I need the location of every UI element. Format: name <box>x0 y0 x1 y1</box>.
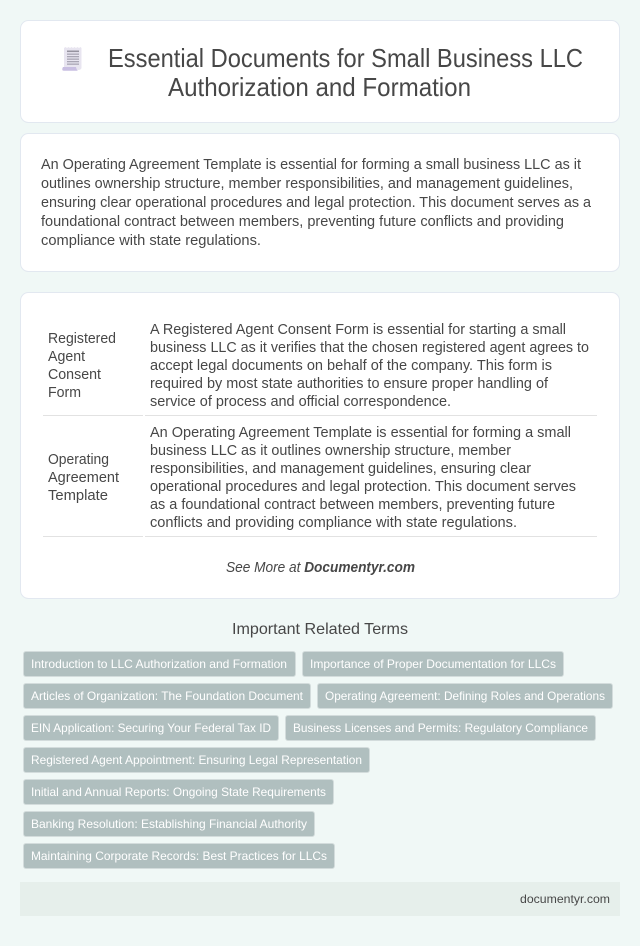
title: Essential Documents for Small Business LLC <box>108 45 583 73</box>
table row: Registered Agent Consent Form: accept legal documents on behalf of the company. This form is <box>150 358 552 374</box>
chip <box>286 716 596 740</box>
table row: Operating Agreement Template: Operating <box>48 452 109 468</box>
panel: documents table <box>20 292 620 598</box>
table row: Operating Agreement Template: as a foundational contract between members, preventing future <box>150 497 555 513</box>
table row: Registered Agent Consent Form: Form <box>48 385 81 401</box>
chip <box>24 844 334 868</box>
chip: Maintaining Corporate Records: Best Practices for LLCs <box>31 849 327 863</box>
chip: Importance of Proper Documentation for LLCs <box>310 657 556 671</box>
title: Authorization and Formation <box>168 74 471 102</box>
chip: Introduction to LLC Authorization and Formation <box>31 657 287 671</box>
chip: Business Licenses and Permits: Regulatory Compliance <box>293 721 588 735</box>
intro text: foundational contract between members, preventing future conflicts and providing <box>41 214 564 230</box>
intro text: ensuring clear operational procedures and legal protection. This document serves as a <box>41 195 591 211</box>
chip <box>24 684 310 708</box>
chip <box>24 780 334 804</box>
intro text: compliance with state regulations. <box>41 233 261 249</box>
chip <box>24 716 278 740</box>
see more link: See More at Documentyr.com <box>226 560 415 576</box>
footer <box>20 882 620 916</box>
chip <box>24 812 314 836</box>
table row: Operating Agreement Template: An Operating Agreement Template is essential for forming a small <box>150 425 571 441</box>
chip <box>318 684 612 708</box>
table row: Registered Agent Consent Form: business LLC as it verifies that the chosen registered agent agrees to <box>150 340 589 356</box>
chip <box>24 748 370 772</box>
table row: Registered Agent Consent Form: Agent <box>48 349 85 365</box>
table row: Operating Agreement Template <box>43 425 597 537</box>
chip: EIN Application: Securing Your Federal Tax ID <box>31 721 271 735</box>
table row: Registered Agent Consent Form <box>43 322 597 416</box>
intro text <box>41 157 591 249</box>
table row: Registered Agent Consent Form: Consent <box>48 367 101 383</box>
chip: Articles of Organization: The Foundation Document <box>31 689 304 703</box>
table row: Operating Agreement Template: operational procedures and legal protection. This document serves <box>150 479 576 495</box>
chip: Banking Resolution: Establishing Financial Authority <box>31 817 307 831</box>
panel: introduction <box>20 134 620 272</box>
table row: Operating Agreement Template: Agreement <box>48 470 119 486</box>
chip: Operating Agreement: Defining Roles and Operations <box>325 689 605 703</box>
icon: document scroll <box>62 47 82 71</box>
chip: Registered Agent Appointment: Ensuring Legal Representation <box>31 753 362 767</box>
title <box>108 45 583 102</box>
intro text: An Operating Agreement Template is essential for forming a small business LLC as it <box>41 157 581 173</box>
table row: Registered Agent Consent Form: A Registered Agent Consent Form is essential for starting a small <box>150 322 566 338</box>
heading: important related terms: Important Related Terms <box>232 621 408 638</box>
table row: Operating Agreement Template: conflicts and providing compliance with state regulations. <box>150 515 517 531</box>
intro text: outlines ownership structure, member responsibilities, and management guidelines, <box>41 176 573 192</box>
table row: Operating Agreement Template: business LLC as it outlines ownership structure, member <box>150 443 511 459</box>
chip <box>302 652 564 676</box>
table row: Registered Agent Consent Form: Registered <box>48 331 116 347</box>
footer: documentyr.com <box>520 892 610 906</box>
panel: title header <box>20 20 620 122</box>
table row: Operating Agreement Template: responsibilities, and management guidelines, ensuring clear <box>150 461 531 477</box>
chip: Initial and Annual Reports: Ongoing State Requirements <box>31 785 326 799</box>
table row: Registered Agent Consent Form: service of process and official correspondence. <box>150 394 451 410</box>
chip <box>24 652 296 676</box>
related terms chips <box>24 652 612 868</box>
table row: Registered Agent Consent Form: required by most state authorities to ensure proper handling of <box>150 376 549 392</box>
table row: Operating Agreement Template: Template <box>48 488 108 504</box>
